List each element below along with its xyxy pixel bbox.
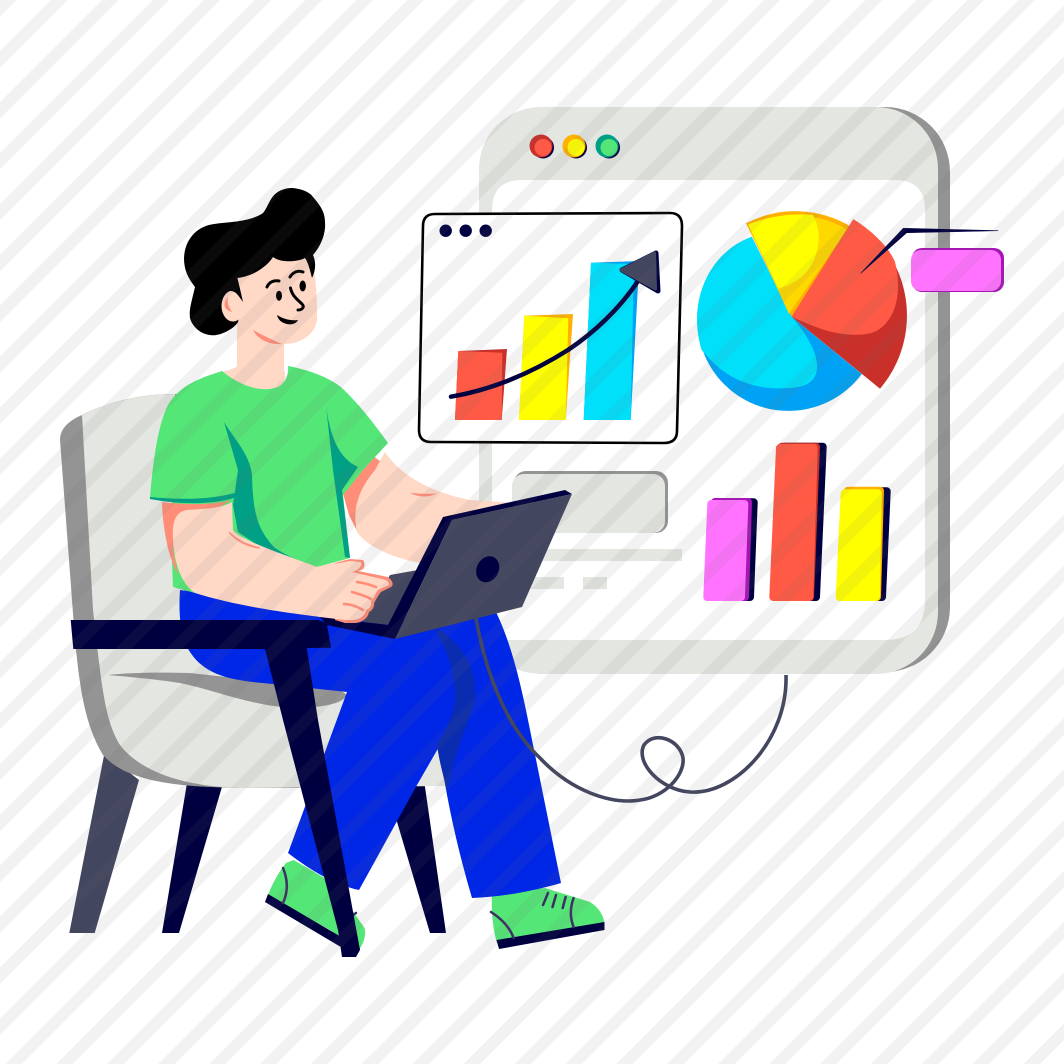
card dots — [440, 224, 492, 237]
shirt fold: right — [326, 406, 358, 558]
chair shell — [60, 394, 300, 788]
chair leg: rear centre — [162, 780, 224, 933]
chair cushion — [82, 394, 447, 788]
laptop keyboard — [363, 570, 418, 625]
chair — [60, 394, 447, 933]
growth arrow head — [621, 253, 658, 291]
bar: pink — [707, 502, 754, 597]
mouth — [277, 315, 298, 324]
growth bar: red — [455, 349, 507, 420]
forearm crease — [229, 532, 260, 548]
sleeve hem — [150, 491, 242, 503]
jaw shadow — [253, 330, 282, 344]
chair front frame — [71, 620, 360, 957]
far arm shadow — [342, 455, 385, 533]
trousers: far leg — [430, 610, 561, 898]
pie slice: yellow — [746, 211, 851, 317]
trousers: near leg — [179, 590, 470, 890]
laptop hinge edge — [388, 490, 572, 639]
pie slice: blue — [698, 237, 862, 411]
growth bar: cyan — [584, 261, 639, 420]
panel: browser window — [479, 107, 1004, 674]
placeholder box — [512, 471, 668, 533]
near arm — [173, 502, 350, 617]
pie slice: red — [792, 219, 907, 389]
bar: yellow — [840, 491, 887, 597]
chair leg: rear right — [395, 780, 446, 933]
far arm — [355, 452, 515, 565]
trouser fold — [433, 627, 475, 790]
neck and face — [222, 245, 317, 396]
seat shadow — [108, 673, 346, 708]
growth bar: yellow — [519, 314, 573, 420]
callout leader line — [861, 228, 998, 273]
window controls — [530, 134, 620, 158]
laptop — [320, 490, 572, 639]
chair leg: rear left — [69, 753, 139, 933]
growth arrow line — [451, 281, 638, 397]
elbow crease — [410, 493, 437, 496]
sideburn — [230, 276, 243, 302]
laptop logo — [472, 552, 504, 586]
card outline — [419, 213, 682, 443]
panel: small growth chart card — [419, 213, 682, 443]
near arm shadow — [162, 500, 232, 575]
browser frame — [479, 107, 938, 674]
pie chart — [697, 211, 907, 411]
nose — [290, 288, 303, 310]
t-shirt — [150, 366, 388, 593]
laptop cable — [476, 618, 786, 801]
shoe: left foot — [265, 860, 365, 956]
hair — [184, 188, 325, 335]
shirt fold: left — [224, 422, 318, 568]
pie highlight: cyan — [697, 237, 817, 388]
browser content area — [492, 180, 925, 640]
eyes — [276, 280, 306, 301]
bottom bar chart — [707, 447, 887, 597]
bar: red — [773, 447, 823, 597]
eyebrows — [267, 271, 303, 287]
ear — [222, 290, 244, 322]
shoe: right foot — [491, 888, 604, 949]
callout tag — [911, 248, 1004, 292]
laptop lid — [395, 494, 572, 639]
hand — [317, 559, 393, 623]
browser shadow — [600, 107, 950, 672]
laptop base — [320, 617, 395, 639]
person — [150, 188, 786, 956]
placeholder text lines — [530, 549, 682, 589]
